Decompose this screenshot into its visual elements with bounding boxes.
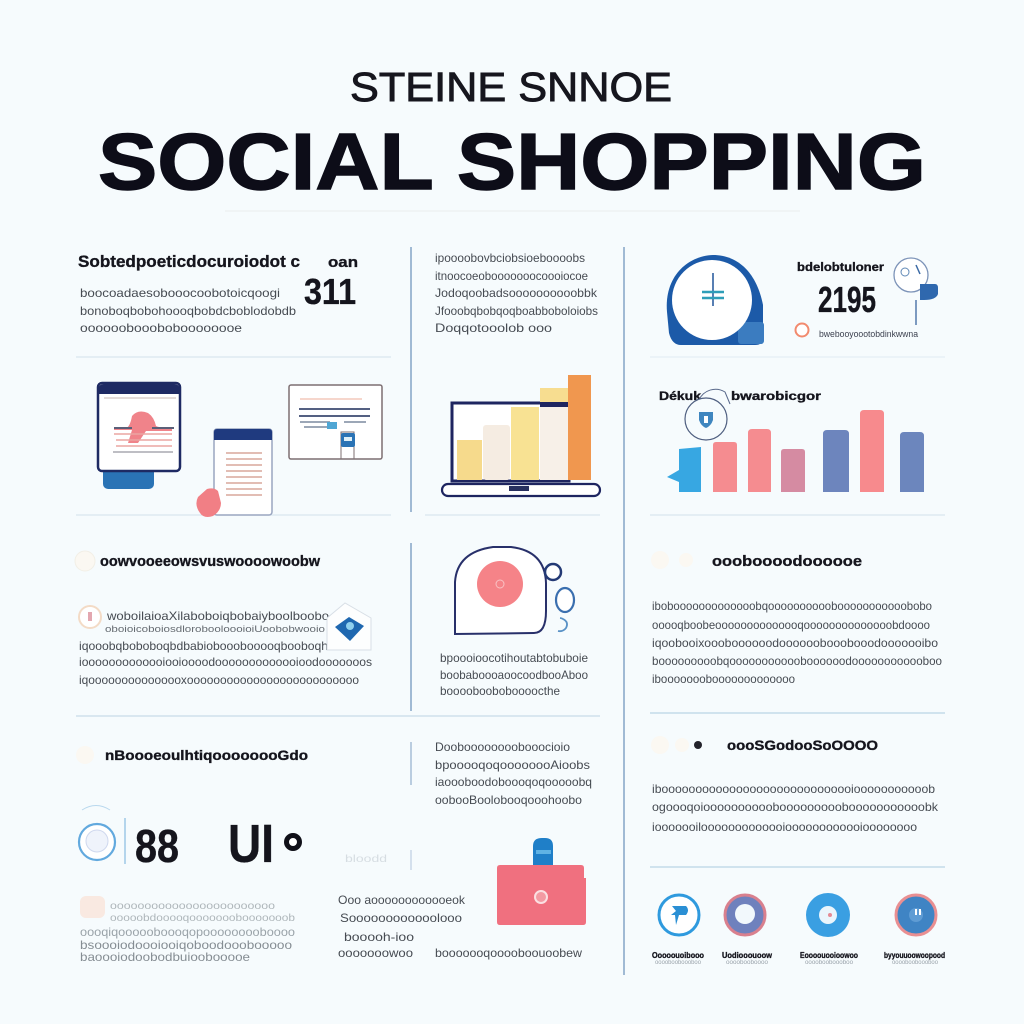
chart title: Dékuk xyxy=(659,389,701,403)
number: 88 xyxy=(135,820,179,872)
text block bottom: ooooooowoo xyxy=(338,946,413,960)
icon: tablet base xyxy=(103,465,154,489)
main title: SOCIAL SHOPPING xyxy=(98,117,926,206)
panel: mid-right text xyxy=(651,551,942,686)
caption text: boooobooboboooocthe xyxy=(440,684,560,698)
caption text: bpoooioocotihoutabtobuboie xyxy=(440,651,588,665)
chart: bar chart xyxy=(659,389,924,492)
badge 3: Eoooouooioowoo xyxy=(800,950,858,960)
text block bottom: Soooooooooooolooo xyxy=(340,911,462,925)
faint body text: ooooobdooooqooooooobooooooob xyxy=(110,912,295,924)
body text xyxy=(79,609,372,687)
bars xyxy=(667,410,924,492)
stat caption: bwebooyoootobdinkwwna xyxy=(819,329,918,339)
badge 1: oooobooboooboo xyxy=(655,960,702,966)
body text: ogoooqoioooooooooobooooooooobooooooooooobk xyxy=(652,800,939,814)
badge 4: byyouuoowoopood xyxy=(884,950,945,960)
body text: iooooooilooooooooooooioooooooooooioooooooo xyxy=(652,820,917,834)
body text: booooooooobqoooooooooooboooooodoooooooooooboo xyxy=(652,654,942,668)
text block top: Dooboooooooobooocioio xyxy=(435,740,570,754)
panel: top-middle text xyxy=(435,251,598,335)
laptop bars xyxy=(457,375,591,480)
icon: bullet xyxy=(796,324,808,336)
body text: woboilaioaXilaboboiqbobaiyboolboobo xyxy=(106,609,329,623)
icon: faint heading circle xyxy=(76,746,94,764)
badge 2: Uodiooouoow xyxy=(722,950,772,960)
body text xyxy=(652,782,939,834)
icon: dial xyxy=(667,255,764,345)
panel: documents illustration xyxy=(98,382,382,517)
panel: lower-left stats xyxy=(76,746,308,964)
eyebrow title: STEINE SNNOE xyxy=(350,64,672,110)
badge 1 xyxy=(652,895,704,966)
badge 4: oooobooboooboo xyxy=(892,960,939,966)
badge 1: Ooooouoibooo xyxy=(652,950,704,960)
badge 3 xyxy=(800,893,858,966)
heading: oowvooeeowsvuswoooowoobw xyxy=(100,553,320,570)
icon: pink folder with blue clip xyxy=(497,838,586,925)
text block top: bpooooqoqoooooooAioobs xyxy=(435,758,590,772)
body text: ibooooooooooooooooooooooooooooiooooooooooob xyxy=(652,782,935,796)
stat number: 2195 xyxy=(818,279,876,320)
faint body text xyxy=(80,896,295,964)
badge 4 xyxy=(884,895,945,966)
text block bottom xyxy=(338,893,582,960)
panel: top-right stat xyxy=(667,255,938,345)
faint body text: oooqiqoooooboooqopooooooooboooo xyxy=(80,925,295,939)
text block top: oobooBoolobooqooohoobo xyxy=(435,793,582,807)
heading suffix: oan xyxy=(328,254,358,271)
heading with circles: oooboooodoooooe xyxy=(712,553,862,570)
badge 3: oooobooboooboo xyxy=(805,960,854,966)
body text: boocoadaesobooocoobotoicqoogi xyxy=(80,286,280,300)
body text: ooooqboobeoooooooooooooqoooooooooooooobdoooo xyxy=(652,618,930,632)
panel: social badges xyxy=(652,893,945,966)
panel: lower-right text xyxy=(651,736,939,834)
body text: iooooooooooooiooioooodooooooooooooioodooooooos xyxy=(79,655,372,669)
panel: mid-left text xyxy=(75,551,372,687)
icon: blue ring xyxy=(79,806,125,864)
stat label: bdelobtuloner xyxy=(797,260,884,274)
faint body text: baoooiodoobodbuioobooooe xyxy=(80,950,250,964)
body text xyxy=(80,286,296,335)
icon: pink tag xyxy=(196,488,221,517)
text block top xyxy=(435,740,592,807)
number: 311 xyxy=(304,271,356,312)
text block bottom: booooooqooooboouoobew xyxy=(435,946,582,960)
body text: iqooobqboboboqbdbabiobooobooooqbooboqhvoo-boo xyxy=(79,639,372,653)
icon: round device xyxy=(455,547,546,634)
icon: shield badge xyxy=(685,389,730,440)
panel: top-left intro xyxy=(78,252,358,335)
laptop screen xyxy=(452,403,569,481)
chart: laptop bar chart xyxy=(442,375,600,496)
heading with circles xyxy=(651,551,862,570)
panel: top-middle text: itnoocoeobooooooocoooiocoe xyxy=(435,269,588,283)
body text: bonoboqbobohoooqbobdcboblodobdb xyxy=(80,304,296,318)
panel: top-middle text: ipoooobovbciobsioeboooobs xyxy=(435,251,585,265)
panel: lower-center xyxy=(338,740,592,960)
body text: iqooooooooooooooxoooooooooooooooooooooooooo xyxy=(79,673,359,687)
panel: top-middle text: Doqqotooolob ooo xyxy=(435,321,552,335)
icon: balloon xyxy=(894,258,938,325)
icon: small rings xyxy=(545,564,574,631)
text block top: iaoooboodoboooqoqooooobq xyxy=(435,775,592,789)
body text: ooooooboooboboooooooe xyxy=(80,321,242,335)
faint body text: bsoooiodoooiooiqoboodooobooooo xyxy=(80,938,292,952)
badge 2: oooobooboooo xyxy=(726,960,769,966)
heading: top-left: Sobtedpoeticdocuroiodot c xyxy=(78,252,300,271)
icon: main document xyxy=(98,382,180,471)
icon: envelope with gem xyxy=(327,603,371,650)
panel: mid-center xyxy=(440,547,588,698)
number dot xyxy=(286,836,300,848)
icon: phone document xyxy=(214,429,272,515)
faint label: bloodd xyxy=(345,853,387,865)
text block bottom: booooh-ioo xyxy=(344,930,414,944)
icon: faint heading circle xyxy=(75,551,95,571)
chart title second part: bwarobicgor xyxy=(731,389,821,403)
panel: top-middle text: Jfooobqbobqoqboabboboloiobs xyxy=(435,304,598,318)
caption text: boobaboooaoocoodbooAboo xyxy=(440,668,588,682)
number: UI xyxy=(228,814,274,874)
caption text xyxy=(440,651,588,698)
heading with circles: oooSGodooSoOOOO xyxy=(727,737,878,753)
body text: ibobooooooooooooobqoooooooooobooooooooooobobo xyxy=(652,599,932,613)
panel: top-middle text: Jodoqoobadsoooooooooobbk xyxy=(435,286,598,300)
laptop base xyxy=(442,484,600,496)
body text: iqoobooixoooboooooodoooooobooobooodooooooibo xyxy=(652,636,938,650)
body text xyxy=(652,599,942,686)
text block bottom: Ooo aoooooooooooeok xyxy=(338,893,466,907)
faint body text: oooooooooooooooooooooooo xyxy=(110,900,275,912)
icon: message card xyxy=(289,385,382,459)
body text: oboioicoboiosdlorobooloooioiUoobobwooio xyxy=(105,624,325,634)
heading: nBoooeoulhtiqoooooooGdo xyxy=(105,747,308,763)
heading with circles xyxy=(651,736,878,754)
body text: ibooooooobooooooooooooo xyxy=(652,672,795,686)
icon: peach circle xyxy=(79,606,101,628)
badge 2 xyxy=(722,894,772,966)
